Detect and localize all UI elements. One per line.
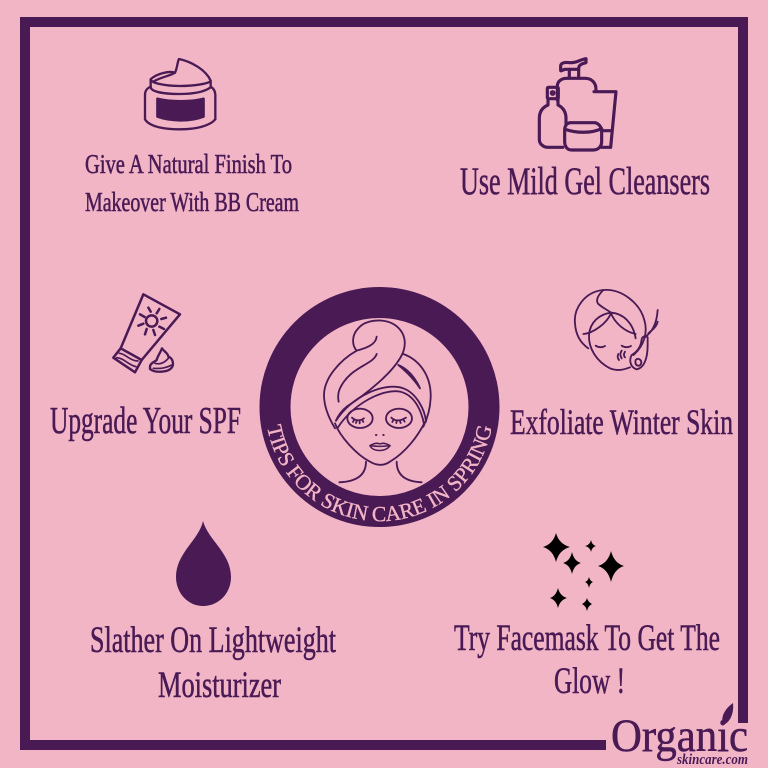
logo: Organic skincare.com: Organic [611, 710, 748, 762]
text: moisturizer tip: Moisturizer [158, 665, 281, 706]
text: facemask tip [454, 618, 720, 702]
icon: moisturizer drop [176, 521, 231, 606]
logo: Organic skincare.com: skincare.com [676, 752, 748, 768]
text: facemask tip: Glow ! [554, 661, 625, 702]
icon: cleanser bottles [539, 59, 616, 150]
curved caption [267, 427, 492, 521]
emblem: tips for skin care in spring [260, 287, 500, 527]
ring [275, 302, 484, 512]
icon: exfoliating face [575, 290, 658, 370]
icon: cream jar [145, 59, 215, 129]
icon: sunscreen tube [113, 294, 180, 372]
text: moisturizer tip: Slather On Lightweight [90, 620, 337, 661]
text: BB cream tip: Makeover With BB Cream [85, 187, 299, 217]
text: moisturizer tip [90, 620, 337, 706]
text: BB cream tip: Give A Natural Finish To [85, 149, 292, 179]
text: SPF tip: Upgrade Your SPF [50, 400, 241, 442]
text: BB cream tip [85, 149, 299, 217]
emblem: tips for skin care in spring: TIPS FOR SKIN CARE IN SPRING [268, 424, 491, 522]
icon: sparkles [543, 533, 624, 611]
illustration: face with towel [324, 320, 431, 482]
